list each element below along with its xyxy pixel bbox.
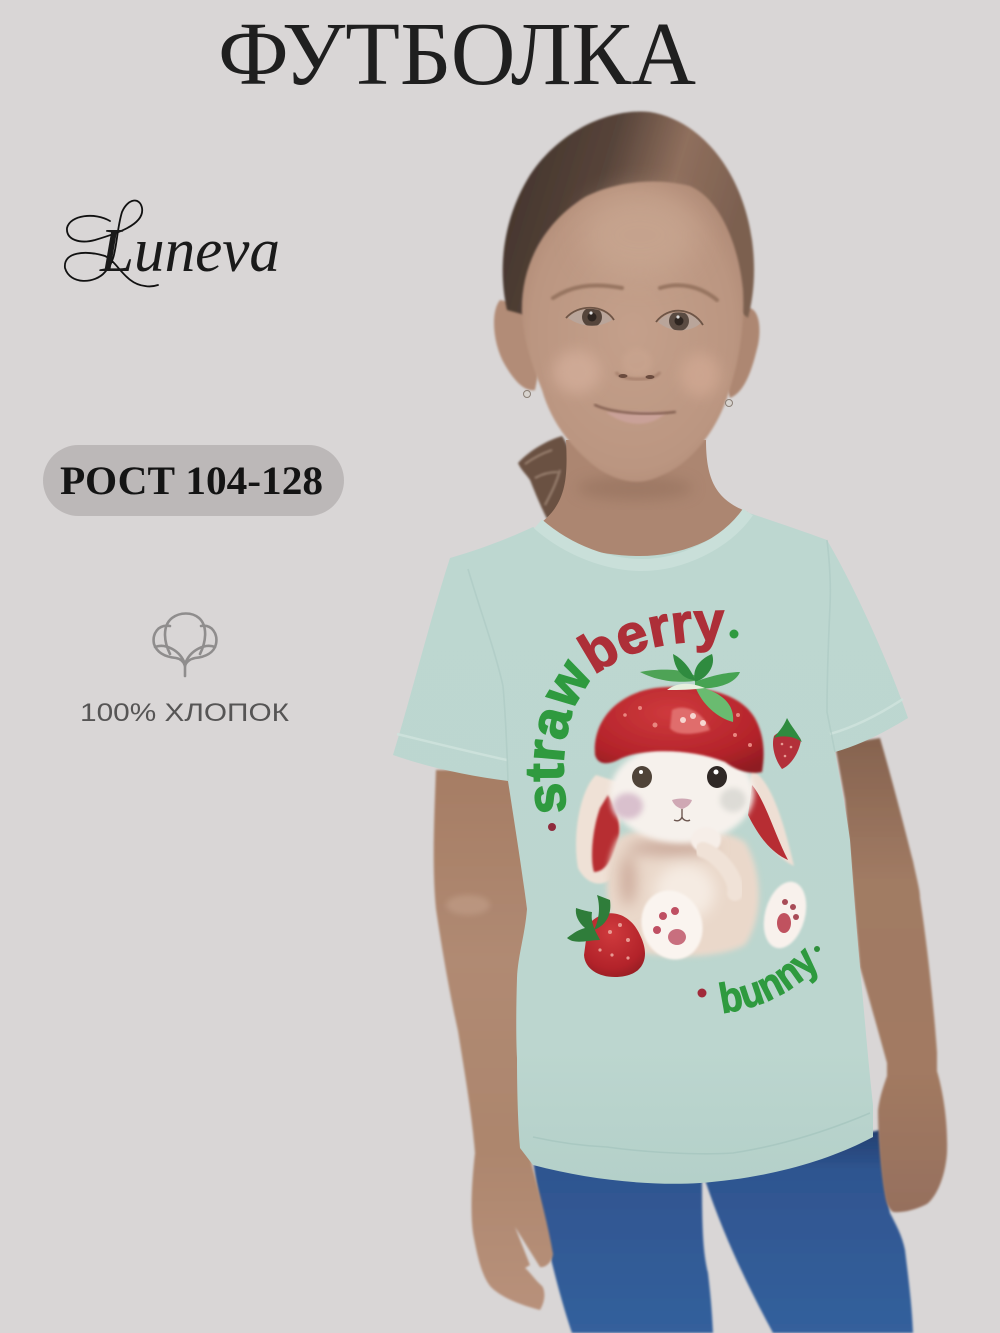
bunny body shading xyxy=(620,841,717,920)
left eye xyxy=(566,307,614,327)
print dots xyxy=(548,630,820,998)
earrings xyxy=(524,390,732,406)
shirt folds xyxy=(397,540,903,1154)
hat leaves xyxy=(640,654,740,722)
bunny paw xyxy=(691,827,721,853)
cheek highlights xyxy=(553,350,720,397)
t-shirt print: strawberry bunny xyxy=(526,610,820,1014)
icon: cotton boll xyxy=(154,614,216,676)
bunny arm xyxy=(703,850,735,893)
shirt collar xyxy=(538,512,748,565)
mouth xyxy=(595,405,675,424)
right ear xyxy=(715,308,759,398)
print text: strawberry: strawberry xyxy=(526,610,725,812)
strawberry: small right xyxy=(773,718,802,769)
bunny eyes xyxy=(632,766,727,788)
left arm xyxy=(434,770,553,1310)
strawberry: lower left xyxy=(567,895,645,977)
logo: Luneva xyxy=(65,201,280,286)
ponytail xyxy=(518,436,573,519)
hair xyxy=(503,112,754,318)
title: ФУТБОЛКА xyxy=(218,5,696,104)
bunny body xyxy=(607,827,759,956)
size pill xyxy=(43,445,344,516)
chin shadow xyxy=(577,476,693,500)
bunny left ear xyxy=(576,775,621,884)
forehead highlight xyxy=(582,193,698,277)
strawberry hat xyxy=(595,687,764,773)
girl photo illustration xyxy=(393,112,947,1333)
jeans xyxy=(533,1130,913,1333)
eyebrows xyxy=(553,285,717,300)
cotton label: 100% ХЛОПОК xyxy=(80,699,290,727)
left ear xyxy=(494,300,545,390)
right hand crease xyxy=(898,1160,900,1200)
right eye xyxy=(656,311,703,331)
t-shirt xyxy=(393,512,908,1184)
face xyxy=(522,182,743,482)
bunny left foot xyxy=(632,882,712,968)
size pill: РОСТ 104-128 xyxy=(60,458,323,503)
bunny cheek xyxy=(613,788,746,819)
neck xyxy=(538,440,748,585)
print text: bunny: bunny xyxy=(718,948,818,1014)
bunny right foot xyxy=(757,877,813,953)
bunny right ear xyxy=(748,770,794,866)
nose xyxy=(616,348,660,379)
right arm xyxy=(835,738,947,1212)
left elbow highlight xyxy=(446,895,490,915)
bunny nose xyxy=(672,798,692,821)
bunny head xyxy=(610,743,754,843)
logo: Luneva: Luneva xyxy=(99,217,280,285)
